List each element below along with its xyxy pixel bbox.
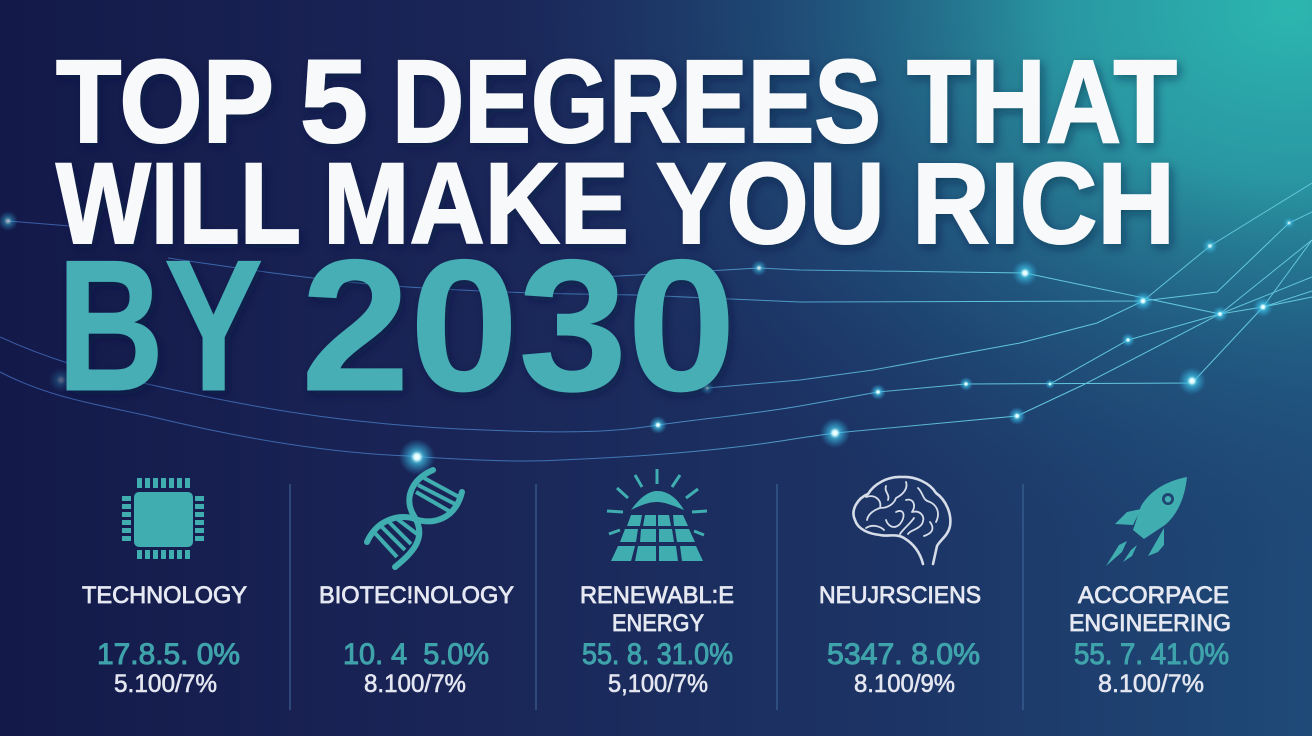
label: aerospace: ACCORPACE — [1078, 582, 1229, 609]
title line 1: 5 — [300, 36, 368, 168]
icon: solar panel with sun — [607, 469, 707, 561]
label: neuroscience: NEUJRSCIENS — [819, 582, 981, 609]
panel: aerospace engineering — [1069, 477, 1231, 698]
stat: technology growth: 17.8.5. 0% — [97, 638, 240, 671]
stat: aerospace growth: 55. 7. 41.0% — [1074, 638, 1229, 671]
icon: brain — [853, 477, 950, 564]
stat: technology salary: 5.100/7% — [114, 670, 217, 698]
title line 2: WILL — [56, 140, 301, 268]
panel: biotechnology — [319, 470, 514, 698]
title line 3 — [57, 221, 736, 430]
label: renewable: RENEWABL:E — [580, 582, 734, 609]
icon: rocket — [1106, 477, 1187, 566]
title line 2: RICH — [912, 140, 1175, 268]
title line 2: YOU — [656, 140, 885, 268]
label: biotechnology: BIOTEC!NOLOGY — [319, 582, 514, 609]
label: technology: TECHNOLOGY — [82, 582, 247, 609]
stat: aerospace salary: 8.100/7% — [1098, 670, 1204, 698]
label: engineering: ENGINEERING — [1069, 610, 1231, 637]
title line 1: TOP — [56, 36, 274, 168]
title line 3: BY — [57, 221, 263, 430]
stat: renewable salary: 5,100/7% — [608, 670, 708, 698]
title line 2: MAKE — [323, 140, 629, 268]
title — [56, 36, 1177, 430]
stat: biotechnology growth: 10. 4 5.0% — [343, 638, 489, 671]
title line 1: THAT — [907, 36, 1177, 168]
title line 3: 2030 — [301, 221, 736, 430]
panel: neuroscience — [819, 477, 981, 698]
title line 2 — [56, 140, 1175, 268]
icon: dna helix — [367, 470, 462, 567]
network lines and glowing nodes — [0, 183, 1312, 475]
icon: microchip — [122, 478, 204, 559]
panel: technology — [82, 478, 247, 698]
column dividers — [290, 484, 1023, 710]
stat: neuroscience growth: 5347. 8.0% — [827, 638, 980, 671]
title line 1 — [56, 36, 1177, 168]
stat: biotechnology salary: 8.100/7% — [364, 670, 466, 698]
stat: neuroscience salary: 8.100/9% — [854, 670, 955, 698]
stat: renewable growth: 55. 8. 31.0% — [582, 638, 733, 671]
title line 1: DEGREES — [392, 36, 881, 168]
panel: renewable energy — [580, 469, 734, 698]
label: energy: ENERGY — [612, 610, 704, 637]
